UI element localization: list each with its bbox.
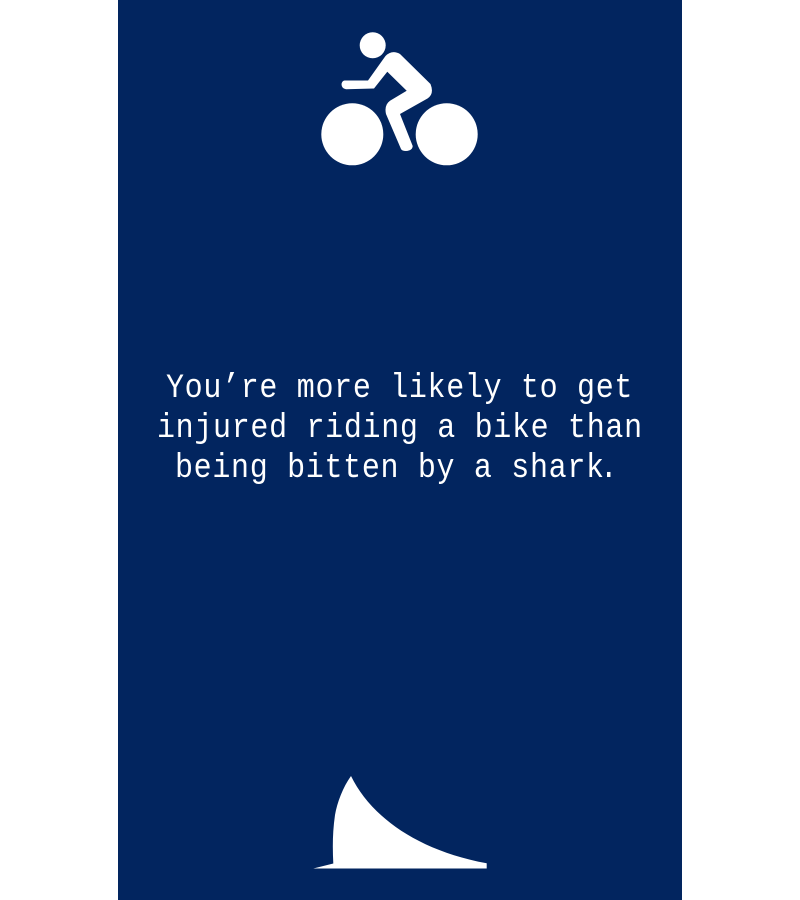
text block: main message: being bitten by a shark. [175, 450, 618, 488]
text block: main message: injured riding a bike than [157, 410, 643, 448]
panel: navy background [118, 0, 682, 900]
left wheel [321, 103, 383, 165]
cyclist body [342, 52, 432, 151]
text block: main message: You’re more likely to get [166, 370, 633, 408]
cyclist head [360, 32, 386, 58]
right wheel [416, 103, 478, 165]
icon: cyclist [321, 32, 478, 166]
icon: shark fin [314, 776, 487, 868]
